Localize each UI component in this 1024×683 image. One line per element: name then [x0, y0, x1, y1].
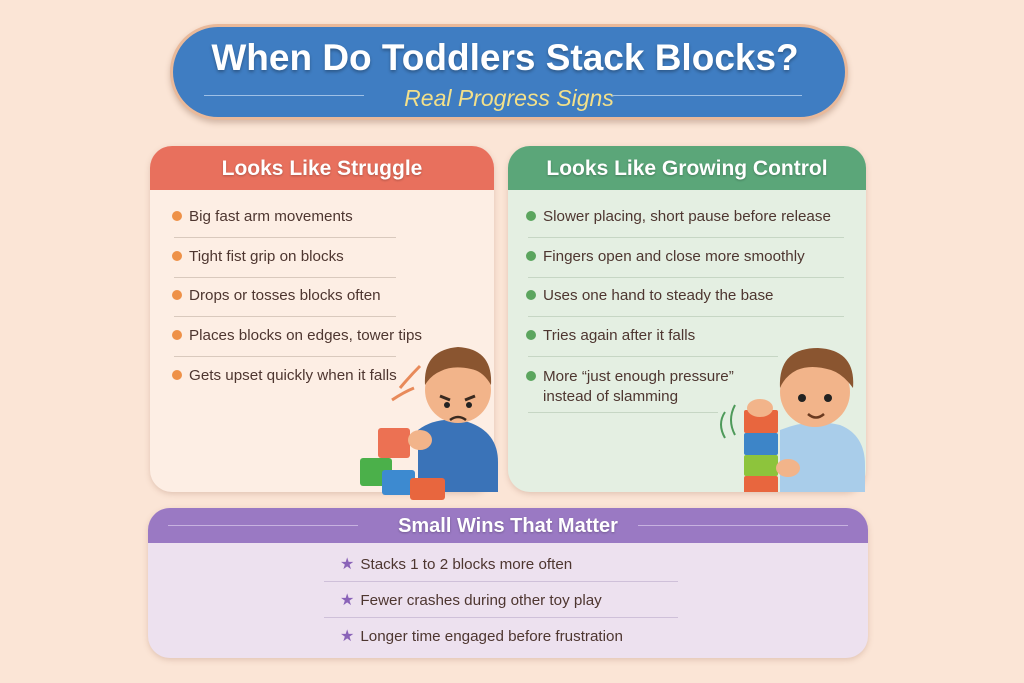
list: wins: ★ Longer time engaged before frustration [340, 628, 623, 645]
list: control: Uses one hand to steady the base [543, 287, 774, 304]
list: wins [324, 556, 678, 645]
panel: growing control [508, 146, 866, 492]
list: struggle [172, 208, 422, 384]
list: control [526, 208, 844, 413]
title banner [170, 24, 848, 120]
heading: struggle [150, 146, 494, 190]
heading: struggle: Looks Like Struggle [222, 157, 422, 180]
list: control: Tries again after it falls [543, 327, 695, 344]
heading: growing control: Looks Like Growing Control [546, 157, 828, 180]
icon: upset toddler [360, 347, 498, 500]
panel: struggle [150, 146, 494, 492]
heading: small wins: Small Wins That Matter [398, 515, 618, 537]
list: struggle: Places blocks on edges, tower tips [189, 327, 422, 344]
list: struggle: Drops or tosses blocks often [189, 287, 381, 304]
icon: calm toddler [720, 348, 865, 492]
title: When Do Toddlers Stack Blocks? [211, 37, 799, 78]
list: struggle: Big fast arm movements [189, 208, 353, 225]
list: struggle: Tight fist grip on blocks [189, 248, 344, 265]
list: control: instead of slamming [543, 388, 678, 405]
list: wins: ★ Fewer crashes during other toy play [340, 592, 602, 609]
list: control: Slower placing, short pause before release [543, 208, 831, 225]
list: struggle: Gets upset quickly when it falls [189, 367, 397, 384]
heading: growing control [508, 146, 866, 190]
panel: small wins [148, 508, 868, 658]
list: control: Fingers open and close more smoothly [543, 248, 805, 265]
list: wins: ★ Stacks 1 to 2 blocks more often [340, 556, 572, 573]
heading: small wins [148, 508, 868, 543]
subtitle: Real Progress Signs [404, 85, 614, 111]
list: control: More “just enough pressure” [543, 368, 734, 385]
